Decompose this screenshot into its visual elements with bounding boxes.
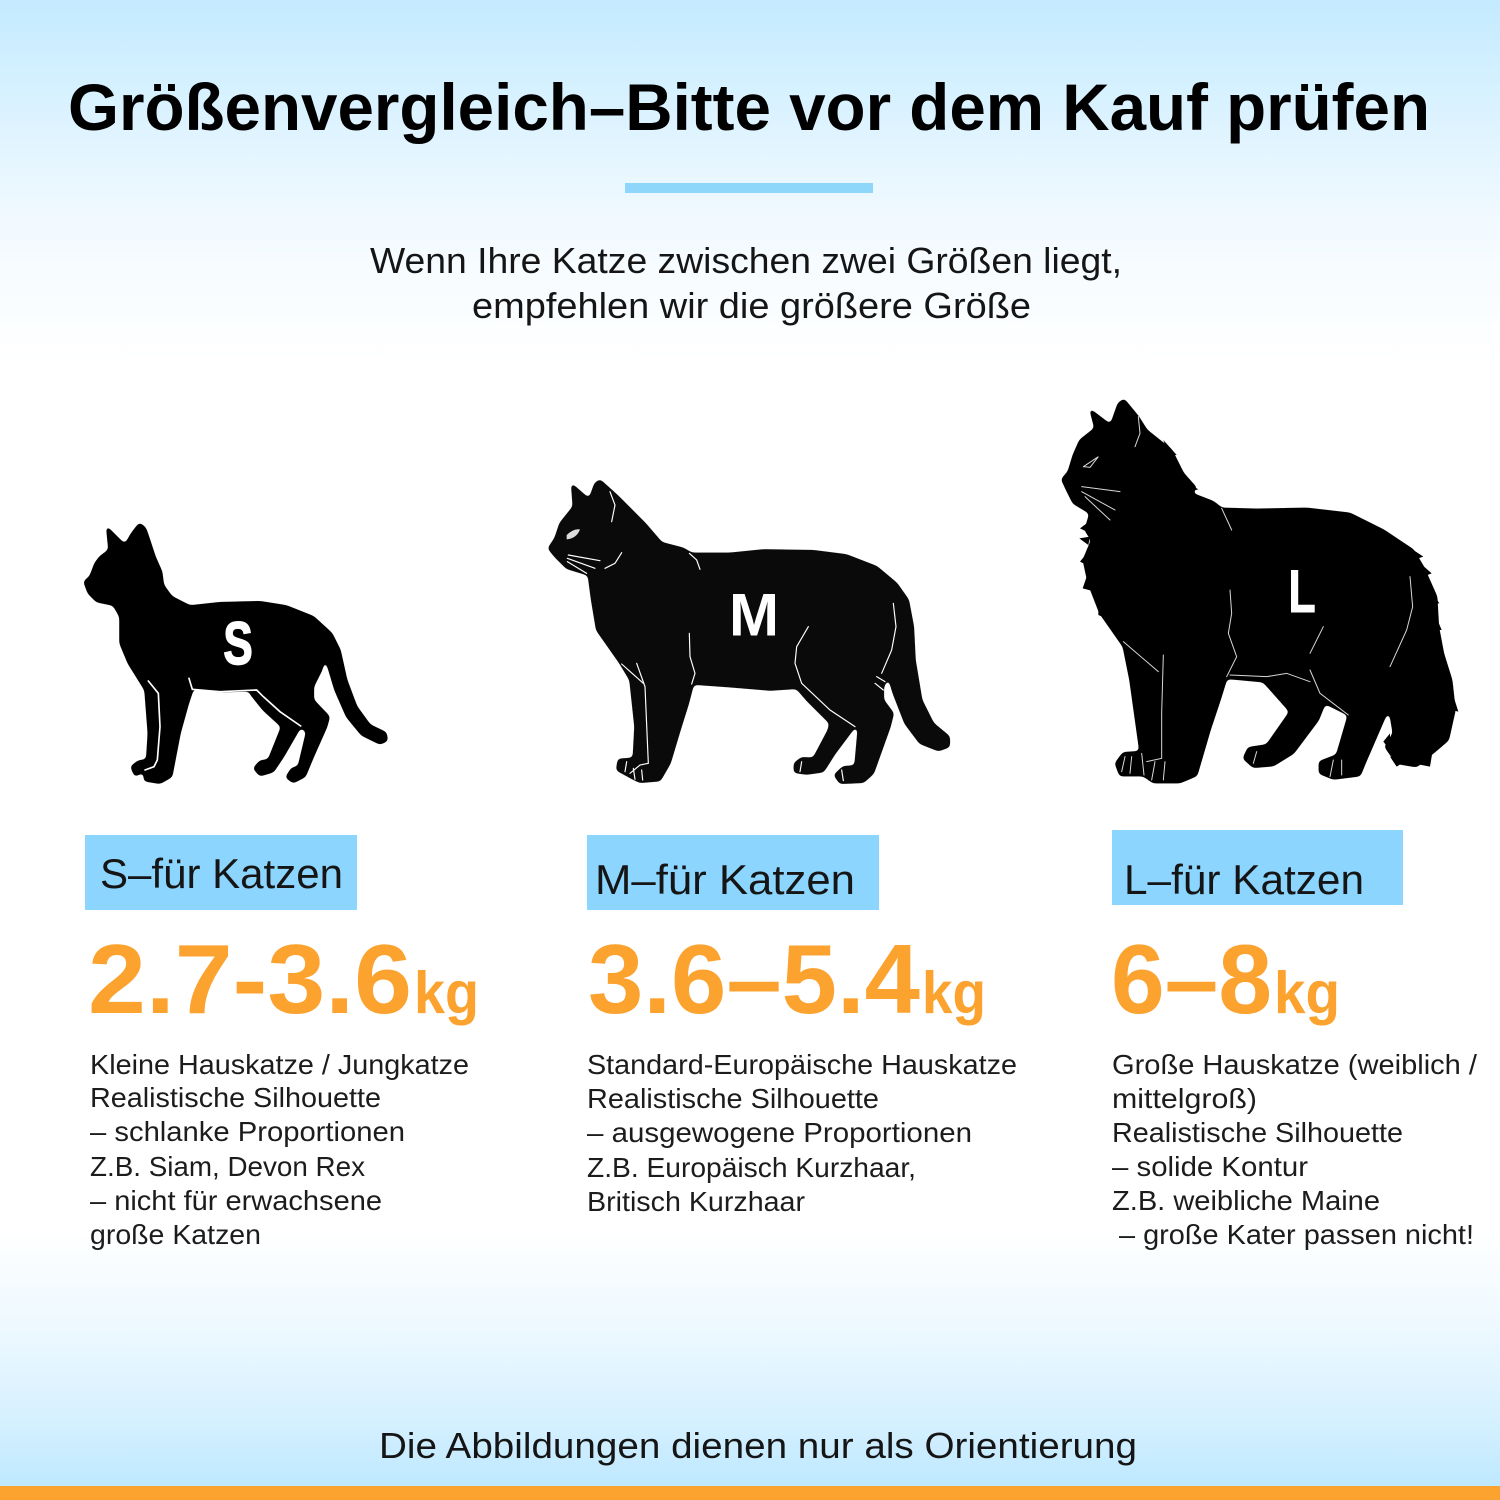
size L description: Z.B. weibliche Maine — [1112, 1185, 1380, 1216]
size letter L: L — [1288, 558, 1316, 625]
title: Größenvergleich–Bitte vor dem Kauf prüfen — [68, 70, 1430, 144]
cat silhouette: medium — [548, 480, 949, 783]
size L weight: kg — [1274, 960, 1340, 1026]
size M label — [587, 835, 879, 910]
subtitle — [370, 240, 1122, 326]
size M description: Standard-Europäische Hauskatze — [587, 1049, 1017, 1080]
size M description — [587, 1049, 1017, 1217]
cat silhouette: large — [1062, 399, 1458, 783]
size M column — [587, 835, 1017, 1217]
size S column — [85, 835, 479, 1250]
size M description: – ausgewogene Proportionen — [587, 1117, 972, 1148]
cat silhouette: small — [84, 523, 387, 783]
size L weight: 6–8 — [1111, 924, 1272, 1034]
size L description: Große Hauskatze (weiblich / — [1112, 1049, 1477, 1080]
size letter S: S — [223, 610, 253, 677]
size L description: Realistische Silhouette — [1112, 1117, 1403, 1148]
size S description: große Katzen — [90, 1219, 261, 1250]
size S description: Z.B. Siam, Devon Rex — [90, 1151, 365, 1182]
subtitle: empfehlen wir die größere Größe — [472, 285, 1031, 326]
size L description: – solide Kontur — [1112, 1151, 1308, 1182]
size S label — [85, 835, 357, 910]
size L description — [1112, 1049, 1477, 1250]
size L description: mittelgroß) — [1112, 1083, 1257, 1114]
size L label: L–für Katzen — [1124, 856, 1364, 903]
size S weight: kg — [414, 960, 479, 1026]
size M description: Britisch Kurzhaar — [587, 1186, 805, 1217]
size S description: Kleine Hauskatze / Jungkatze — [90, 1049, 469, 1080]
footer note: Die Abbildungen dienen nur als Orientierung — [379, 1425, 1137, 1466]
size M weight: 3.6–5.4 — [588, 924, 920, 1034]
size L description: – große Kater passen nicht! — [1119, 1219, 1474, 1250]
fur spikes — [1079, 440, 1458, 767]
size M description: Z.B. Europäisch Kurzhaar, — [587, 1152, 916, 1183]
size S description: Realistische Silhouette — [90, 1082, 381, 1113]
title accent bar — [625, 183, 873, 193]
size M description: Realistische Silhouette — [587, 1083, 879, 1114]
size M weight: kg — [922, 960, 986, 1026]
size S description: – nicht für erwachsene — [90, 1185, 382, 1216]
size S weight: 2.7-3.6 — [88, 924, 412, 1034]
size M label: M–für Katzen — [595, 856, 855, 903]
size letter M: M — [729, 582, 779, 649]
subtitle: Wenn Ihre Katze zwischen zwei Größen liegt, — [370, 240, 1122, 281]
size L column — [1111, 830, 1477, 1250]
size S label: S–für Katzen — [100, 850, 343, 897]
bottom orange bar — [0, 1486, 1500, 1500]
size S description — [90, 1049, 469, 1250]
size S description: – schlanke Proportionen — [90, 1116, 405, 1147]
size L label — [1112, 830, 1403, 905]
